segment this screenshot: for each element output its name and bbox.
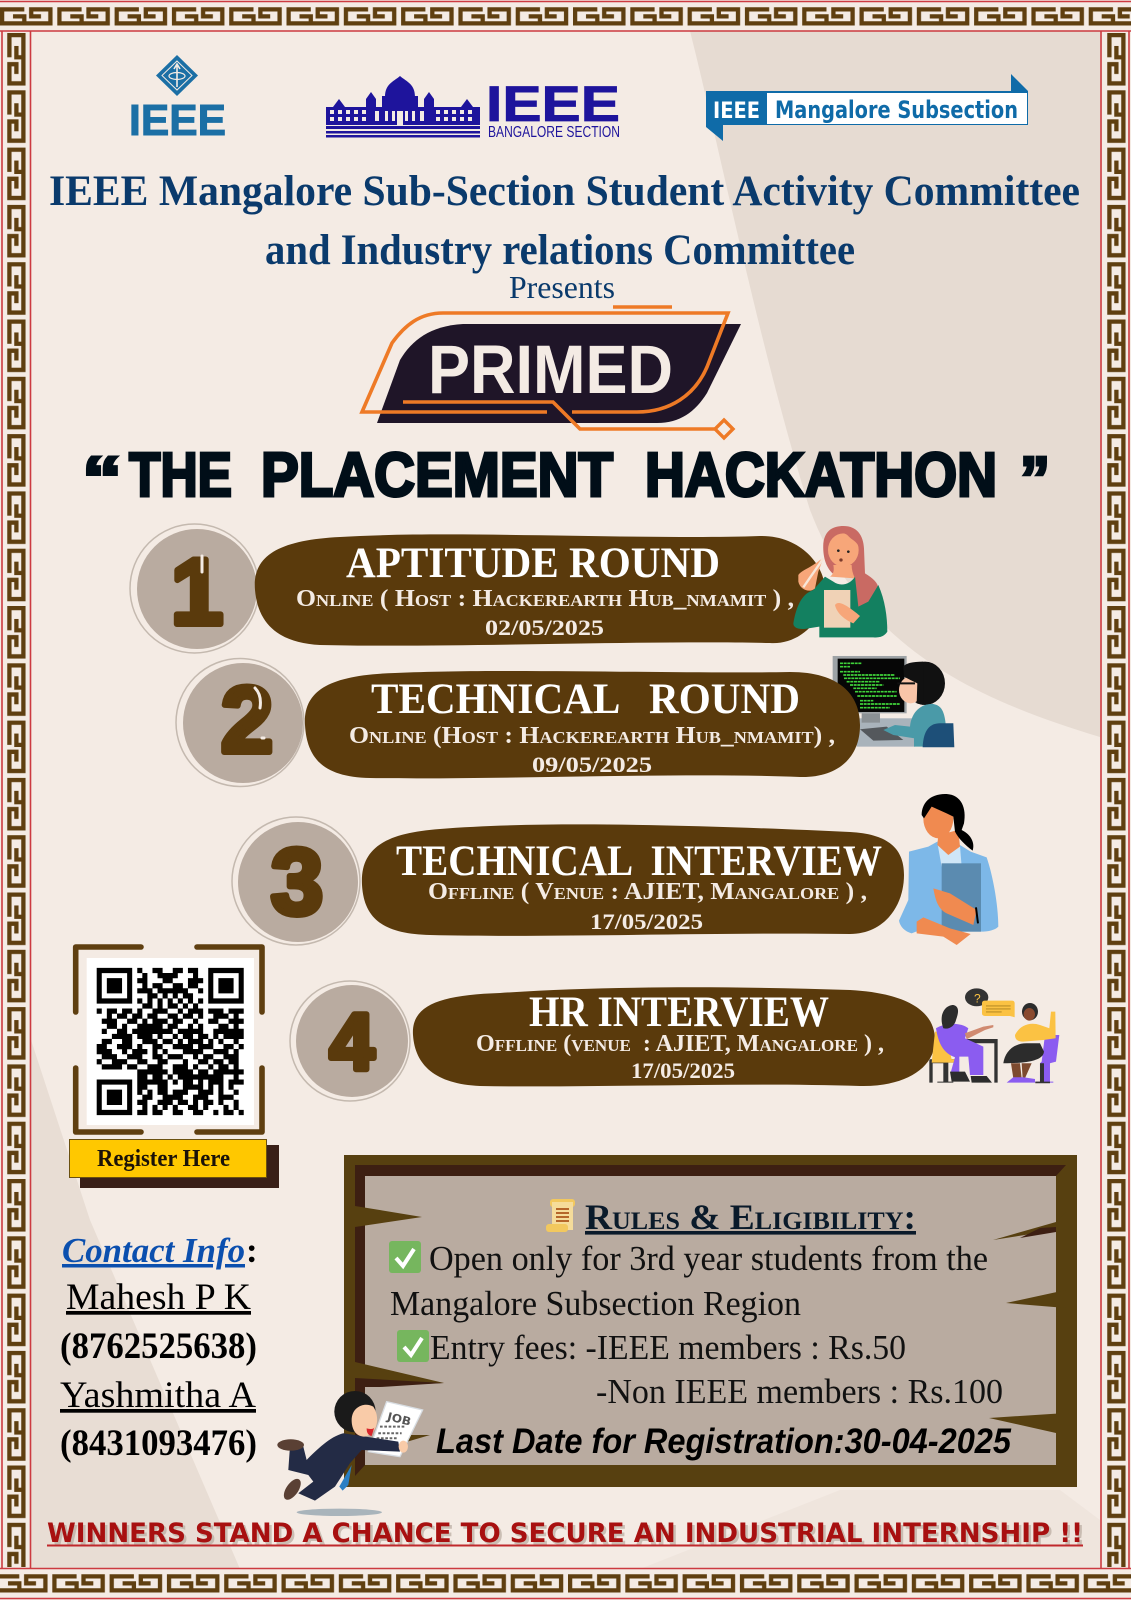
footer: winners banner: WINNERS STAND A CHANCE TO SECURE AN INDUSTRIAL INTERNSHIP !!: [50, 1520, 1086, 1552]
round 1 panel: [130, 524, 825, 653]
QR code with brackets: [76, 947, 262, 1132]
round 3 panel: TECHNICAL INTERVIEW: [396, 838, 882, 885]
logo: IEEE Bangalore Section: IEEE: [486, 76, 620, 132]
rules heading: Rules & Eligibility:: [585, 1197, 916, 1237]
footer: winners banner: WINNERS STAND A CHANCE TO SECURE AN INDUSTRIAL INTERNSHIP !!: [47, 1518, 1083, 1549]
round 3 panel: 3: [271, 829, 323, 934]
icon: check 1: [389, 1241, 421, 1273]
rule 2 text: Entry fees: -IEEE members : Rs.50: [430, 1328, 906, 1367]
subtitle: the placement hackathon: ”: [1020, 445, 1050, 514]
illustration: programmer at computer: [833, 656, 954, 747]
title: and Industry relations Committee: [265, 227, 855, 274]
contact info: [60, 1231, 258, 1464]
round 1 panel: Online ( Host : Hackerearth Hub_nmamit ) ,: [296, 586, 794, 612]
register button: [70, 1140, 279, 1188]
logo: IEEE Bangalore Section: BANGALORE SECTION: [488, 124, 620, 141]
subtitle: the placement hackathon: PLACEMENT: [261, 441, 613, 510]
logo: IEEE: IEEE: [129, 96, 226, 145]
illustration: running job seeker: [277, 1391, 423, 1516]
round 4 panel: 4: [330, 997, 375, 1086]
round 2 panel: [176, 658, 860, 786]
last date: Last Date for Registration:30-04-2025: [436, 1422, 1011, 1461]
round 1 panel: APTITUDE ROUND: [346, 540, 720, 587]
round 4 panel: Offline (venue : AJIET, Mangalore ) ,: [476, 1031, 884, 1057]
contact info: :: [246, 1231, 258, 1270]
round 2 panel: 09/05/2025: [532, 752, 652, 777]
subtitle: the placement hackathon: HACKATHON: [645, 441, 997, 510]
subtitle: the placement hackathon: THE: [129, 441, 232, 510]
logo: IEEE Mangalore Subsection: IEEE: [713, 99, 760, 124]
round 2 panel: TECHNICAL ROUND: [371, 676, 800, 723]
round 4 panel: [290, 981, 935, 1101]
logo: IEEE Bangalore Section: [326, 76, 620, 141]
subtitle: the placement hackathon: [82, 441, 1050, 514]
title: IEEE Mangalore Sub-Section Student Activity Committee: [49, 168, 1080, 215]
round 3 panel: Offline ( Venue : AJIET, Mangalore ) ,: [428, 879, 867, 905]
rule 1 text: Open only for 3rd year students from the: [429, 1239, 988, 1278]
logo: IEEE Mangalore Subsection: [706, 74, 1028, 141]
logo: PRIMED: [362, 307, 741, 438]
logo: IEEE Mangalore Subsection: Mangalore Subsection: [775, 96, 1018, 124]
contact info: Contact Info: [62, 1231, 245, 1270]
illustration: two people at interview: ?: [974, 992, 981, 1006]
round 1 panel: 02/05/2025: [485, 615, 604, 640]
icon: scroll: [546, 1199, 575, 1232]
contact info: Mahesh P K: [66, 1277, 251, 1318]
illustration: woman with folder: [899, 794, 998, 945]
icon: check 2: [397, 1330, 429, 1362]
contact info: (8431093476): [60, 1423, 257, 1464]
round 3 panel: [232, 817, 904, 945]
register button: Register Here: [97, 1146, 230, 1172]
round 3 panel: 17/05/2025: [590, 909, 703, 934]
rule 1 text: Mangalore Subsection Region: [390, 1284, 801, 1323]
panel: rules and eligibility: [344, 1155, 1077, 1487]
logo: PRIMED: PRIMED: [428, 331, 673, 408]
subtitle: the placement hackathon: “: [82, 445, 122, 514]
contact info: (8762525638): [60, 1326, 257, 1367]
illustration: girl with notepad: [793, 526, 887, 637]
illustration: running job seeker: JOB: [385, 1409, 413, 1429]
contact info: Yashmitha A: [60, 1375, 256, 1416]
round 2 panel: 2: [221, 667, 273, 772]
logo: IEEE: [129, 55, 226, 145]
round 4 panel: 17/05/2025: [631, 1058, 735, 1083]
round 4 panel: HR INTERVIEW: [529, 989, 829, 1036]
title: [49, 168, 1080, 274]
round 1 panel: 1: [171, 539, 223, 644]
rule 2 text: [430, 1328, 1003, 1411]
illustration: two people at interview: [929, 988, 1059, 1083]
round 2 panel: Online (Host : Hackerearth Hub_nmamit) ,: [349, 723, 835, 749]
rule 2 text: -Non IEEE members : Rs.100: [596, 1372, 1003, 1411]
rule 1 text: [390, 1239, 988, 1323]
presents label: Presents: [509, 269, 615, 305]
